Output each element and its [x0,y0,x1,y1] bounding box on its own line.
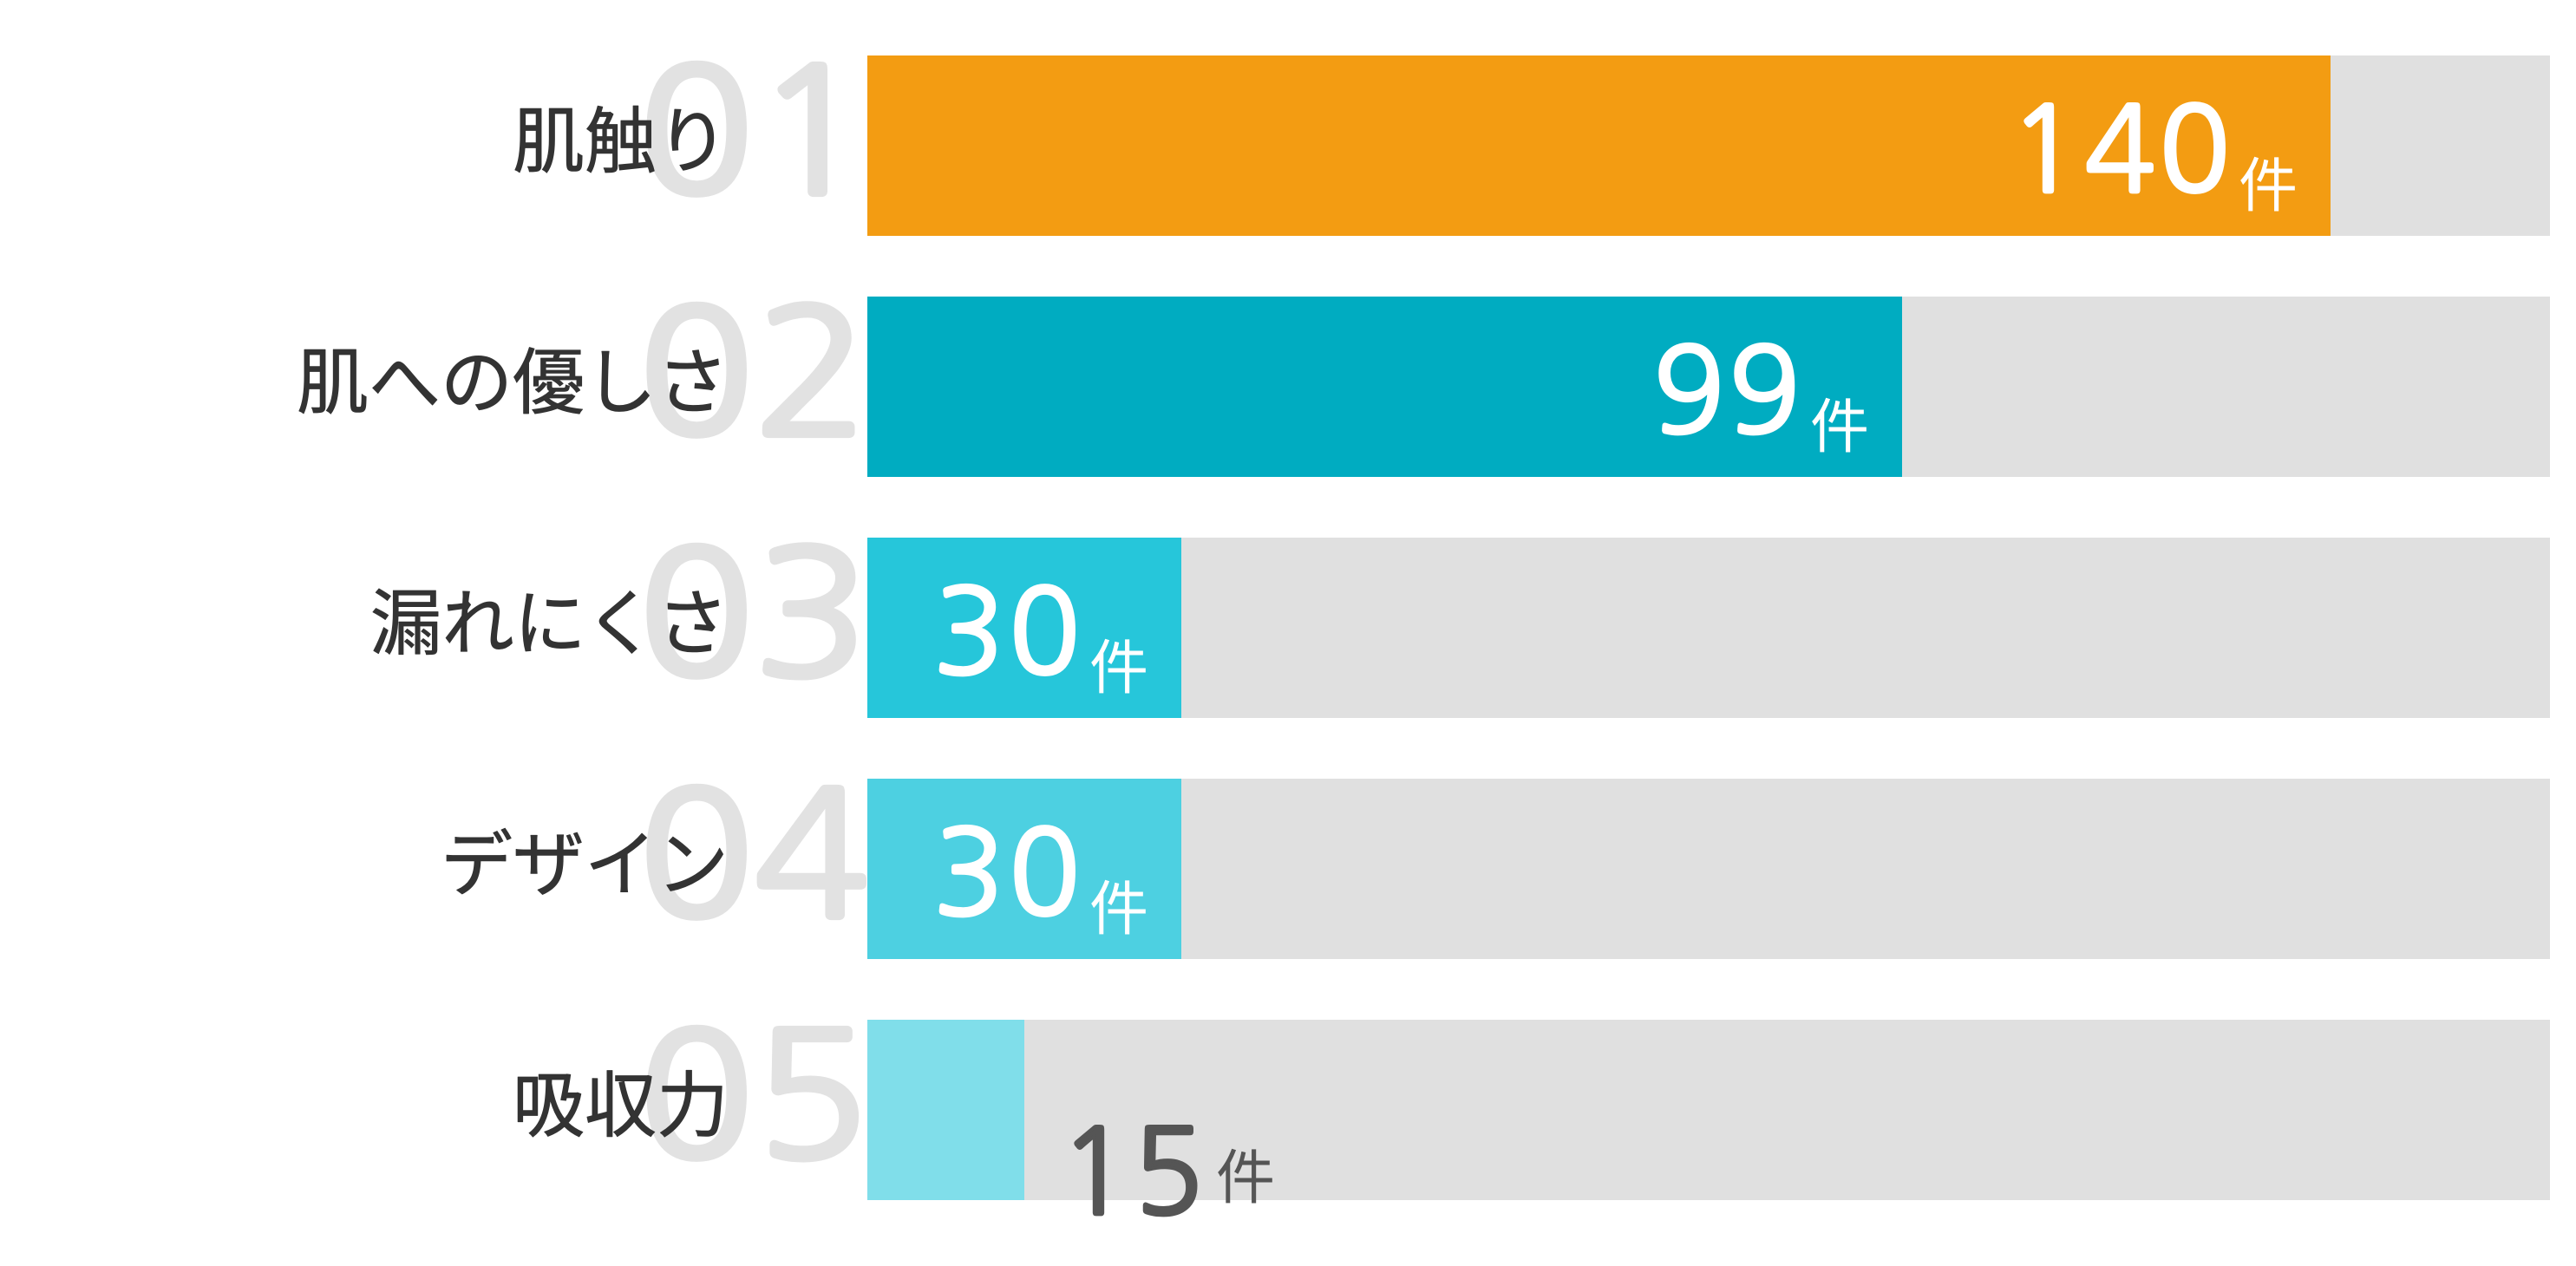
rank number 01: 01 [638,46,869,219]
value 30: 30 [933,573,1080,691]
rank number 04: 04 [638,769,869,942]
bar fill [867,1020,1024,1200]
unit: 件 [1089,877,1148,943]
bar fill [867,297,1902,477]
row 1: 肌触り [513,46,2550,236]
unit: 件 [2239,153,2298,219]
label: 吸収力 [513,1066,729,1146]
bar track [867,538,2550,718]
value 140: 140 [2009,91,2230,209]
unit: 件 [1089,636,1148,702]
unit: 件 [1810,395,1869,460]
row 2: 肌への優しさ [297,287,2550,477]
row 4: デザイン [441,769,2550,959]
rank number 02: 02 [638,287,869,460]
label: デザイン [441,825,729,905]
value 15: 15 [1059,1113,1204,1231]
bar track [867,779,2550,959]
value 99: 99 [1653,332,1800,450]
bar fill [867,779,1181,959]
bar track [867,1020,2550,1200]
unit: 件 [1216,1145,1275,1211]
row 3: 漏れにくさ [370,528,2550,718]
bar track [867,55,2550,236]
rank number 03: 03 [638,528,869,701]
label: 肌触り [513,101,729,182]
bar fill [867,538,1181,718]
row 5: 吸収力 [513,1010,2550,1231]
value 30: 30 [933,814,1080,932]
label: 肌への優しさ [297,343,729,423]
bar fill [867,55,2331,236]
bar track [867,297,2550,477]
rank number 05: 05 [638,1010,869,1183]
label: 漏れにくさ [370,584,729,664]
